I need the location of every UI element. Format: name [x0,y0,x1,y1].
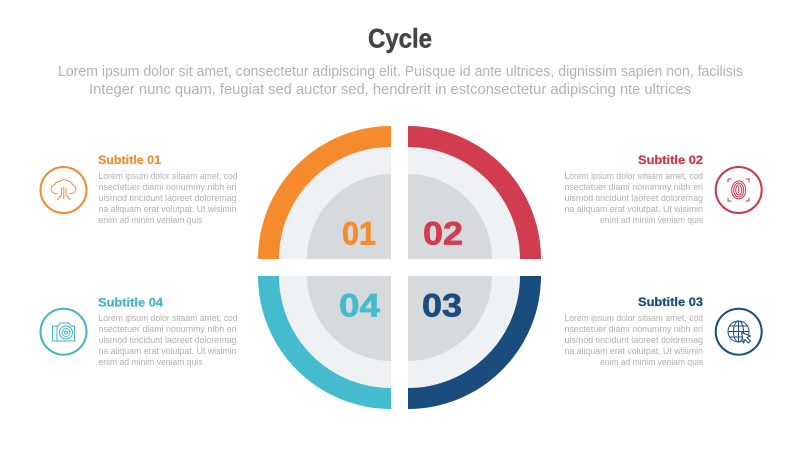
intro paragraph: Lorem ipsum dolor sit amet, consectetur adipiscing elit. Puisque id ante ultrices, dignissim sapien non, facilisis [58,64,743,80]
quadrant 01: 01 [342,216,376,252]
body text 04: nsectetuer diami nonummy nibh eri [98,324,236,334]
body text 01: uismod tincidunt laoreet doloremag [98,193,236,203]
subtitle 01: Subtitle 01 [98,155,162,167]
body text 02: na aliquam erat volutpat. Ut wisimin [564,204,703,214]
body text 03: na aliquam erat volutpat. Ut wisimin [564,346,703,356]
icon: globe with cursor [716,309,762,355]
body text 04 [98,313,238,367]
cycle diagram [258,126,541,409]
subtitle 04: Subtitle 04 [98,298,164,310]
icon: fingerprint [716,167,762,213]
quadrant 03: 03 [422,288,462,324]
body text 01: enim ad minim veniam quis [98,215,203,225]
body text 02: Lorem ipsum dolor sitaam amet, cod [564,171,703,181]
body text 03: enim ad minim veniam quis [600,357,703,367]
body text 02 [564,171,703,225]
item 04 [40,298,238,367]
body text 03: nsectetuer diami nonummy nibh eri [564,324,703,334]
quadrant 04: 04 [339,288,380,324]
item 01 [40,155,238,225]
quadrant 02 [408,126,541,259]
body text 03 [564,313,703,367]
intro paragraph [58,64,743,98]
body text 04: enim ad minim veniam quis [98,357,203,367]
title: Cycle [368,24,432,54]
quadrant 02: 02 [423,216,463,252]
body text 01: na aliquam erat volutpat. Ut wisimin [98,204,236,214]
body text 01 [98,171,238,225]
subtitle 03: Subtitle 03 [638,297,703,309]
quadrant 04 [258,276,391,409]
body text 04: Lorem ipsum dolor sitaam amet, cod [98,313,238,323]
item 02 [564,155,762,225]
body text 04: uismod tincidunt laoreet doloremag [98,335,236,345]
icon: cloud network [40,167,86,213]
subtitle 02: Subtitle 02 [638,155,703,167]
quadrant 01 [258,126,391,259]
icon: camera [40,309,86,355]
intro paragraph: Integer nunc quam, feugiat sed auctor sed, hendrerit in estconsectetur adipiscing nte ultrices [89,82,691,98]
quadrant 03 [408,276,541,409]
body text 02: uismod tincidunt laoreet doloremag [564,193,703,203]
body text 03: Lorem ipsum dolor sitaam amet, cod [564,313,703,323]
body text 01: nsectetuer diami nonummy nibh eri [98,182,236,192]
body text 02: enim ad minim veniam quis [600,215,703,225]
body text 03: uismod tincidunt laoreet doloremag [564,335,703,345]
body text 04: na aliquam erat volutpat. Ut wisimin [98,346,236,356]
body text 02: nsectetuer diami nonummy nibh eri [564,182,703,192]
body text 01: Lorem ipsum dolor sitaam amet, cod [98,171,238,181]
item 03 [564,297,762,367]
